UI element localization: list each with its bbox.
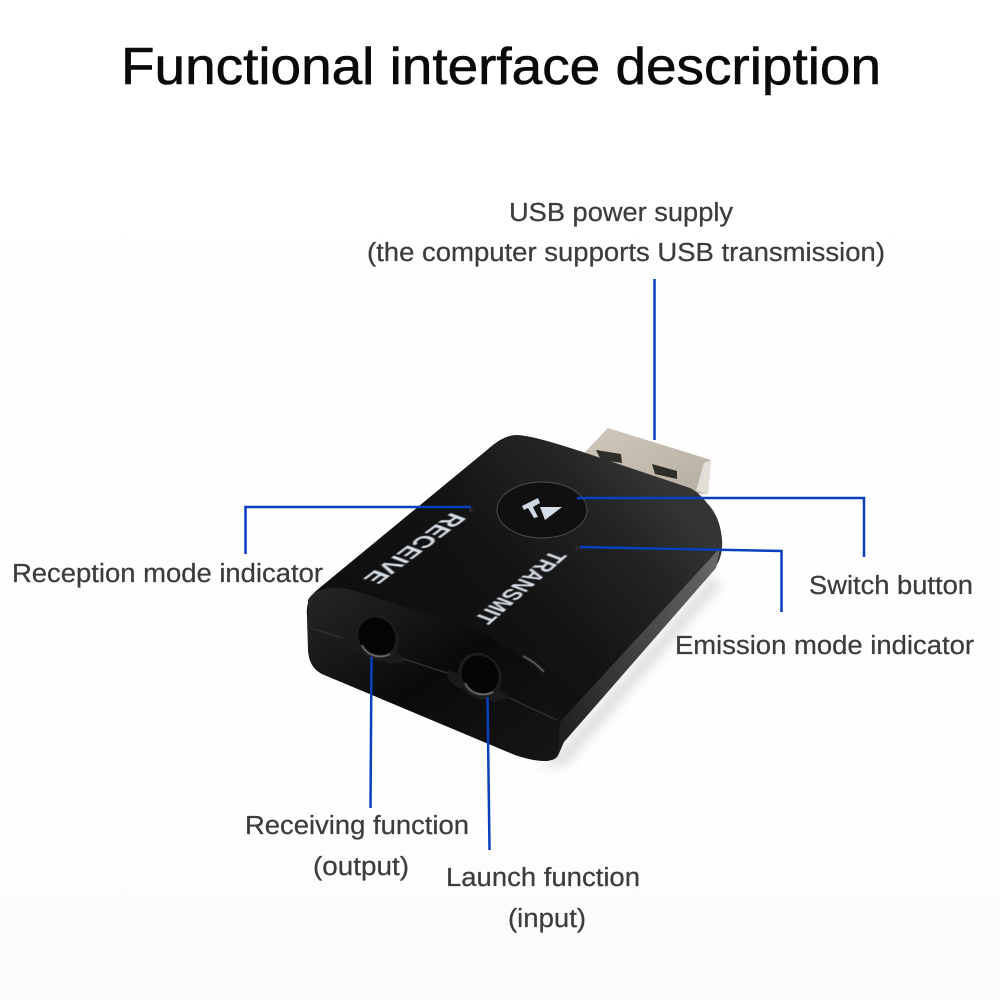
- RECEIVE label: RECEIVE: [357, 510, 472, 587]
- label: Receiving function: (output): [313, 853, 409, 881]
- right side band: [557, 548, 720, 758]
- line: launch function: [488, 697, 490, 850]
- line: receiving function: [370, 657, 372, 808]
- product photo: USB audio adapter: [307, 428, 722, 768]
- title: Functional interface description: [121, 38, 881, 96]
- shadow: [540, 575, 722, 768]
- line: USB power: [653, 279, 656, 440]
- indicator dots: [469, 508, 579, 550]
- label: Receiving function: Receiving function: [245, 812, 469, 840]
- label: USB power supply: [367, 199, 885, 267]
- label: USB power supply: USB power supply: [509, 199, 733, 227]
- label: Emission mode indicator: Emission mode indicator: [675, 632, 975, 660]
- seam line: [307, 627, 557, 720]
- front rim highlight: [523, 656, 544, 672]
- device body: [307, 435, 722, 761]
- label: USB power supply: (the computer supports USB transmission): [367, 239, 885, 267]
- left jack: [342, 607, 407, 669]
- label: Receiving function: [245, 812, 469, 881]
- leader lines: [246, 279, 864, 850]
- front face: [308, 588, 560, 760]
- label: Launch function: (input): [508, 905, 586, 933]
- TRANSMIT label: TRANSMIT: [467, 548, 572, 627]
- label: Launch function: [446, 864, 640, 933]
- line: switch button: [577, 498, 864, 557]
- USB plug: [585, 428, 711, 494]
- right jack: [447, 645, 510, 707]
- label: Launch function: Launch function: [446, 864, 640, 892]
- line: emission indicator: [580, 547, 782, 612]
- line: reception indicator: [246, 507, 471, 554]
- switch button: [497, 482, 587, 538]
- label: Switch button: Switch button: [809, 572, 973, 600]
- label: Reception mode indicator: Reception mode indicator: [12, 560, 324, 588]
